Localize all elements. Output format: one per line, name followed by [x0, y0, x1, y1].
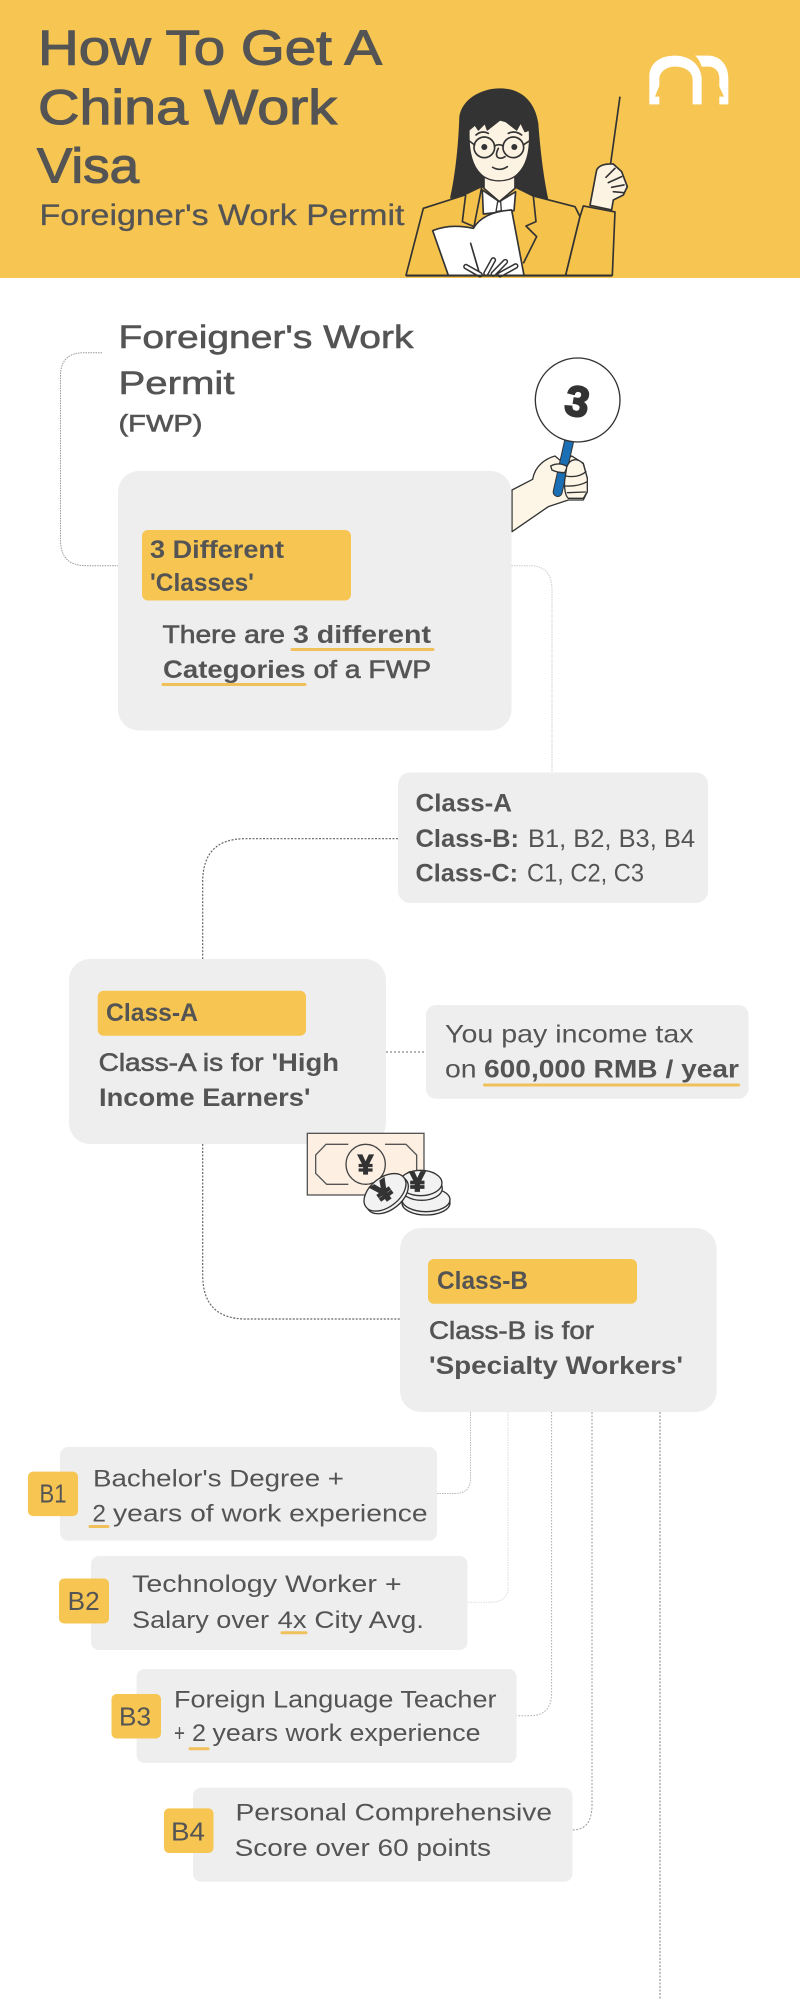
- badge: B3: [112, 1694, 161, 1738]
- heading: Foreigner's Work Permit (FWP): [118, 319, 414, 438]
- connector: class B to B1: [437, 1412, 470, 1494]
- hand on book: [466, 260, 516, 275]
- connector: class B to next section: [659, 1412, 661, 2000]
- connector: class list to class A: [203, 839, 398, 959]
- panel: B3: Foreign Language Teacher: [174, 1687, 496, 1714]
- heading: Foreigner's Work Permit (FWP): Permit: [118, 365, 234, 401]
- panel: B3: years work experience: [212, 1720, 480, 1747]
- icon: yuan bill and coins: ¥: [358, 1149, 374, 1180]
- connector: class B to B3: [516, 1412, 552, 1716]
- text: high income earners: Income Earners': [99, 1084, 310, 1112]
- panel: class list: C1, C2, C3: [527, 860, 644, 888]
- panel: B4: Score over 60 points: [235, 1835, 491, 1862]
- panel: B2: Technology Worker +: [132, 1571, 402, 1598]
- text: high income earners: [99, 1049, 339, 1112]
- title: China Work: [38, 81, 338, 135]
- panel: class list: [398, 772, 708, 903]
- panel: class list: B1, B2, B3, B4: [528, 825, 695, 853]
- panel: B1: [28, 1447, 437, 1541]
- text: specialty workers: Class-B is for: [429, 1317, 594, 1345]
- badge: B3: B3: [119, 1702, 151, 1732]
- panel: B1: Bachelor's Degree +: [93, 1466, 344, 1493]
- jacket body: [406, 187, 580, 275]
- badge: B1: B1: [40, 1479, 66, 1509]
- text: high income earners: 'High: [272, 1049, 339, 1077]
- text: 3 different categories: of a FWP: [314, 656, 431, 684]
- glasses and facial features: [469, 132, 529, 169]
- panel: 3 different classes: [118, 471, 512, 730]
- icon: yuan bill and coins: ¥: [410, 1166, 426, 1197]
- connector: class A to class B: [203, 1144, 400, 1319]
- book: [433, 210, 524, 275]
- badge: B2: B2: [68, 1586, 100, 1616]
- lapels: [462, 187, 482, 227]
- text: specialty workers: 'Specialty Workers': [429, 1352, 683, 1380]
- text: 3 different categories: There are: [162, 621, 285, 649]
- panel: B4: [164, 1788, 572, 1882]
- text: specialty workers: [429, 1317, 683, 1380]
- text: 3 different categories: [162, 621, 433, 684]
- shirt: [482, 190, 516, 214]
- badge: B1: [28, 1472, 78, 1516]
- connector: heading to main panel: [60, 353, 118, 566]
- panel: B1: 2: [92, 1500, 106, 1528]
- label: Class-B: Class-B: [437, 1267, 528, 1295]
- badge: B4: [164, 1808, 214, 1853]
- icon: hand holding number 3 sign: [512, 358, 620, 532]
- label: 3 Different Classes: 'Classes': [150, 569, 254, 597]
- panel: class list: Class-A: [416, 790, 512, 818]
- title: Visa: [37, 140, 140, 194]
- panel: income tax note: [426, 1005, 749, 1099]
- panel: class A: [69, 959, 386, 1144]
- label: 3 Different Classes: 3 Different: [150, 536, 285, 564]
- icon: yuan bill and coins: ¥: [368, 1174, 399, 1210]
- face: [469, 120, 530, 181]
- icon: logo: [649, 56, 728, 104]
- panel: class list: Class-B:: [416, 825, 519, 853]
- connector: class B to B4: [572, 1412, 592, 1830]
- header banner: [0, 0, 800, 278]
- label: Class-B: [428, 1259, 637, 1304]
- tie: [496, 202, 501, 212]
- text: 3 different categories: 3 different: [293, 621, 432, 649]
- pointer: [611, 97, 620, 163]
- panel: B3: +: [174, 1720, 185, 1747]
- heading: Foreigner's Work Permit (FWP): (FWP): [118, 410, 202, 438]
- badge: B4: B4: [171, 1817, 205, 1847]
- panel: B4: Personal Comprehensive: [236, 1800, 552, 1827]
- panel: class list: Class-C:: [416, 860, 518, 888]
- panel: B3: 2: [192, 1720, 206, 1747]
- label: Class-A: [98, 991, 306, 1036]
- title: [37, 22, 382, 194]
- panel: B1: years of work experience: [113, 1500, 428, 1528]
- panel: B2: [59, 1556, 468, 1650]
- panel: B2: City Avg.: [314, 1607, 424, 1634]
- badge: B2: [59, 1578, 109, 1624]
- panel: income tax note: on: [445, 1056, 477, 1084]
- heading: Foreigner's Work Permit (FWP): Foreigner's Work: [118, 319, 414, 355]
- connector: main panel to class list: [512, 566, 552, 772]
- illustration: teacher with pointer and book: [406, 88, 627, 276]
- neck: [484, 175, 515, 202]
- panel: income tax note: 600,000 RMB / year: [484, 1056, 739, 1084]
- panel: B2: 4x: [278, 1607, 307, 1634]
- icon: yuan bill and coins: [307, 1133, 450, 1221]
- title: How To Get A: [38, 22, 382, 76]
- text: high income earners: Class-A is for: [99, 1049, 264, 1077]
- connector: class B to B2: [468, 1412, 508, 1602]
- panel: income tax note: You pay income tax: [445, 1021, 694, 1049]
- raised hand: [590, 164, 627, 210]
- panel: B3: [112, 1669, 517, 1763]
- text: 3 different categories: Categories: [163, 656, 306, 684]
- hair: [450, 88, 548, 199]
- panel: B2: Salary over: [132, 1607, 269, 1634]
- connector: class A to income tax note: [386, 1051, 426, 1053]
- subtitle: Foreigner's Work Permit: [40, 199, 405, 232]
- panel: class B: [400, 1228, 717, 1412]
- floor line: [406, 273, 612, 279]
- label: 3 Different Classes: [142, 530, 351, 600]
- right sleeve: [566, 206, 615, 275]
- label: Class-A: Class-A: [106, 999, 198, 1027]
- icon: hand holding number 3 sign: 3: [561, 376, 593, 428]
